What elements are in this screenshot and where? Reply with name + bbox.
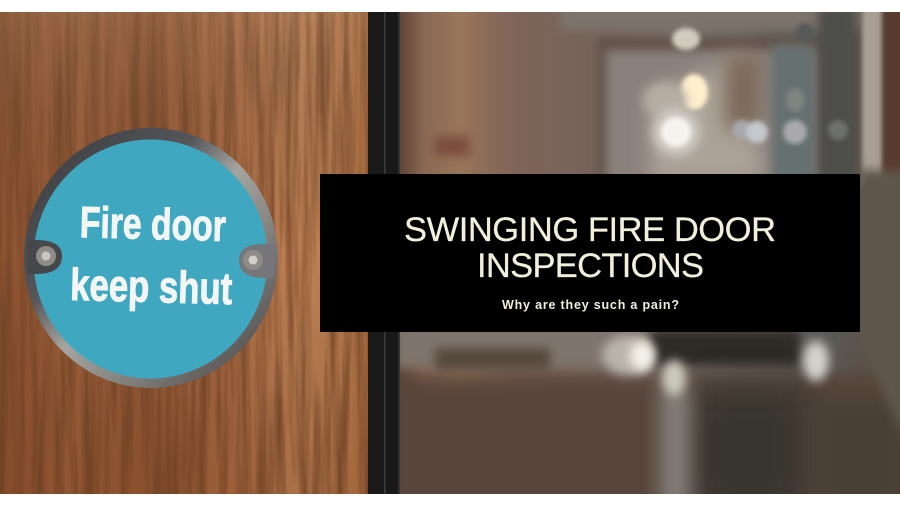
lower wall bbox=[400, 332, 644, 372]
sign text: Fire door bbox=[79, 198, 226, 251]
blue face bbox=[34, 140, 268, 378]
red wall sign bbox=[434, 136, 470, 156]
back wall bright area bbox=[650, 55, 765, 185]
title panel bbox=[320, 174, 860, 332]
sign text: keep shut bbox=[70, 259, 233, 314]
lower lights bbox=[602, 335, 654, 375]
steel rim bbox=[24, 128, 278, 388]
distant dark doorway bbox=[650, 330, 800, 366]
heading: INSPECTIONS bbox=[477, 247, 704, 285]
ceiling lights bbox=[672, 28, 700, 50]
heading: SWINGING FIRE DOOR bbox=[404, 211, 776, 249]
ceiling band bbox=[559, 12, 861, 32]
door edge: black seal strip bbox=[368, 12, 400, 494]
heading bbox=[404, 211, 776, 285]
light column at right bbox=[862, 5, 882, 185]
sign: fire door keep shut bbox=[24, 128, 278, 388]
right screw bbox=[239, 244, 275, 278]
blue-grey corridor column bbox=[772, 45, 816, 185]
floor light reflection bbox=[660, 385, 690, 506]
subheading: Why are they such a pain? bbox=[502, 298, 679, 312]
left screw bbox=[27, 240, 62, 274]
door: wooden panel bbox=[0, 12, 368, 494]
sign text bbox=[70, 198, 234, 314]
dark floor area bbox=[690, 385, 810, 506]
right wall bbox=[860, 164, 900, 430]
blurred corridor background photo bbox=[385, 0, 900, 506]
floor bbox=[401, 369, 876, 494]
doorway frame bbox=[596, 34, 816, 174]
